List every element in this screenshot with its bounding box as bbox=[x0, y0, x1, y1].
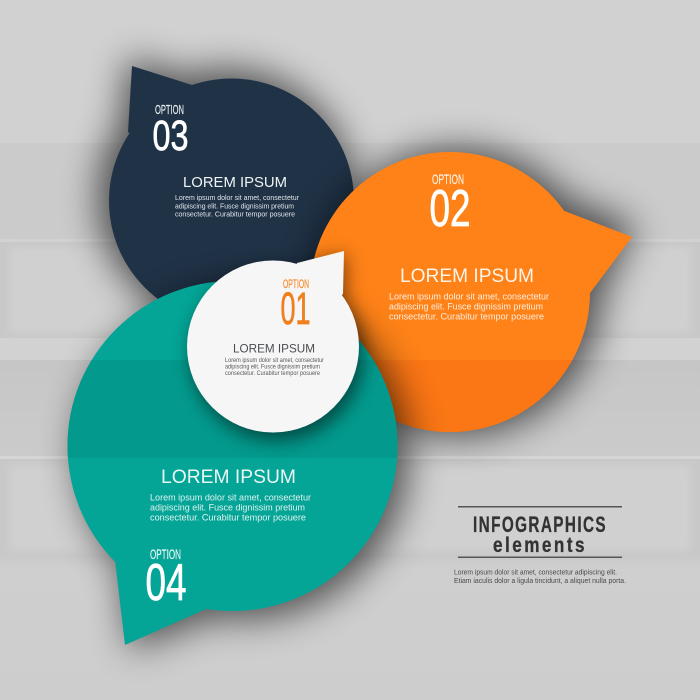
option 01 body text: consectetur. Curabitur tempor posuere bbox=[225, 371, 321, 377]
title block: infographics elements: elements bbox=[493, 534, 587, 557]
panel: option 03 navy bubble bbox=[109, 66, 354, 324]
option 01 body text: adipiscing elit. Fusce dignissim pretium bbox=[225, 364, 320, 370]
footer text: Etiam iaculis dolor a ligula tincidunt, a aliquet nulla porta. bbox=[454, 578, 626, 585]
title block: infographics elements bbox=[458, 506, 622, 558]
footer text bbox=[454, 570, 626, 585]
option 04 body text: Lorem ipsum dolor sit amet, consectetur bbox=[150, 492, 311, 502]
option 02 body text: adipiscing elit. Fusce dignissim pretium bbox=[389, 302, 543, 312]
option 02 body text: Lorem ipsum dolor sit amet, consectetur bbox=[389, 292, 549, 302]
option 04 label: OPTION bbox=[150, 546, 181, 562]
option 01 label: OPTION bbox=[283, 279, 309, 291]
option 02 number: 02 bbox=[430, 180, 470, 238]
option 04 body text: adipiscing elit. Fusce dignissim pretium bbox=[150, 502, 305, 512]
footer text: Lorem ipsum dolor sit amet, consectetur adipiscing elit. bbox=[454, 570, 617, 576]
option 01 body text bbox=[225, 358, 324, 377]
shadow: teal bubble bbox=[77, 288, 409, 650]
panel: option 02 orange bubble bbox=[310, 152, 632, 432]
shadow: orange bubble bbox=[314, 148, 636, 436]
option 04 number: 04 bbox=[146, 554, 186, 612]
option 03 body text: consectetur. Curabitur tempor posuere bbox=[175, 210, 295, 218]
option 03 body text: Lorem ipsum dolor sit amet, consectetur bbox=[175, 193, 299, 202]
option 03 body text bbox=[175, 193, 299, 218]
shadow: white bubble bbox=[190, 254, 364, 441]
option 01 number: 01 bbox=[280, 283, 310, 334]
option 03 body text: adipiscing elit. Fusce dignissim pretium bbox=[175, 202, 294, 210]
shadow: navy bubble bbox=[98, 58, 354, 325]
option 04 body text bbox=[150, 492, 311, 522]
option 02 label: OPTION bbox=[432, 171, 464, 187]
option 03 number: 03 bbox=[152, 112, 188, 160]
option 04 body text: consectetur. Curabitur tempor posuere bbox=[150, 512, 306, 522]
option 02 heading: LOREM IPSUM bbox=[400, 266, 534, 287]
panel: option 01 white bubble bbox=[187, 251, 359, 432]
option 02 body text bbox=[389, 292, 549, 322]
option 03 heading: LOREM IPSUM bbox=[183, 174, 287, 191]
option 03 label: OPTION bbox=[155, 102, 184, 117]
title block: infographics elements: INFOGRAPHICS bbox=[473, 512, 607, 537]
option 04 heading: LOREM IPSUM bbox=[161, 467, 296, 488]
option 01 heading: LOREM IPSUM bbox=[233, 342, 315, 356]
option 02 body text: consectetur. Curabitur tempor posuere bbox=[389, 312, 544, 322]
option 01 body text: Lorem ipsum dolor sit amet, consectetur bbox=[225, 358, 324, 364]
panel: option 04 teal bubble bbox=[67, 281, 399, 645]
